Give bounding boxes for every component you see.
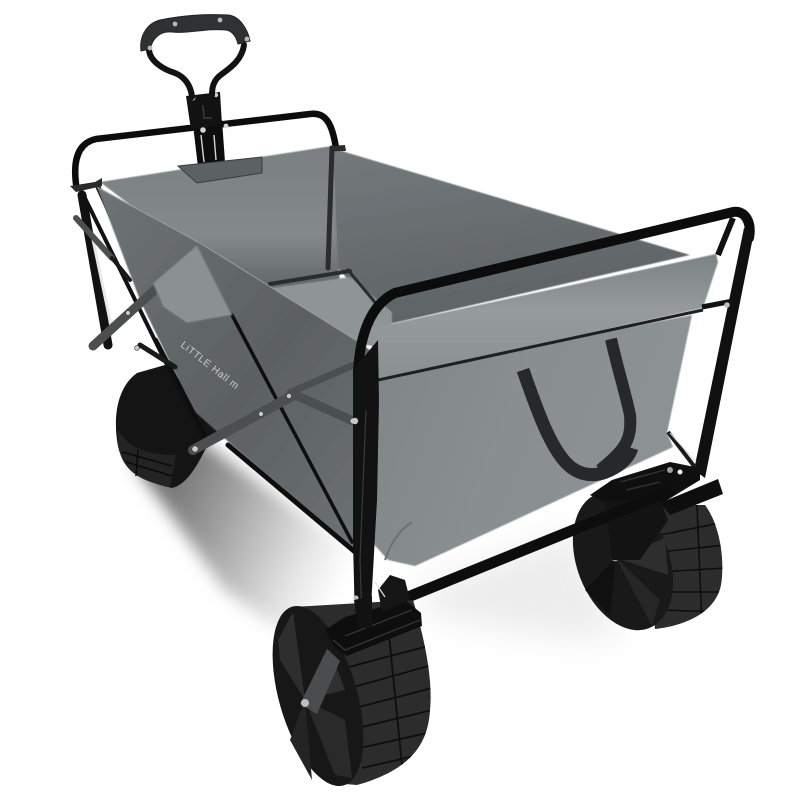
scissor arms bbox=[76, 218, 356, 450]
basket floor bbox=[272, 277, 392, 350]
handle grip bbox=[141, 15, 250, 51]
ground shadow bbox=[135, 440, 620, 640]
right fork and chassis bbox=[590, 462, 723, 560]
front left wheel bbox=[272, 600, 431, 786]
front left fork bbox=[300, 575, 422, 714]
handle bracket bbox=[186, 92, 228, 133]
back wall of the basket bbox=[100, 146, 340, 292]
rear top rail bbox=[75, 114, 336, 184]
front top flap bbox=[372, 254, 718, 382]
side panel edge highlight bbox=[97, 187, 356, 340]
front top rail bbox=[358, 212, 750, 372]
rear left wheel bbox=[116, 365, 225, 488]
left front post bbox=[352, 340, 379, 625]
frame bolts bbox=[126, 311, 356, 452]
back wall tab bbox=[178, 157, 262, 183]
handle rivets bbox=[148, 18, 249, 50]
front lower panel bbox=[370, 315, 692, 566]
side panel frame tubes bbox=[156, 315, 355, 552]
rail joints bbox=[70, 145, 346, 192]
side panel bbox=[97, 187, 370, 552]
right front post bbox=[668, 218, 754, 478]
left post foot bbox=[354, 596, 372, 628]
handle post bbox=[193, 120, 225, 167]
rear frame legs bbox=[80, 187, 204, 440]
corner seam bbox=[385, 522, 412, 560]
right front wheel bbox=[572, 496, 722, 630]
inner right wall of the basket bbox=[332, 147, 690, 325]
carry strap bbox=[523, 339, 632, 475]
axle bbox=[403, 490, 672, 599]
side pocket bbox=[153, 245, 232, 323]
floor and corner straps bbox=[270, 148, 378, 306]
handle shafts bbox=[149, 45, 244, 97]
flap piping bbox=[378, 310, 703, 380]
brand text: LiTTLE Hall m bbox=[178, 340, 241, 392]
